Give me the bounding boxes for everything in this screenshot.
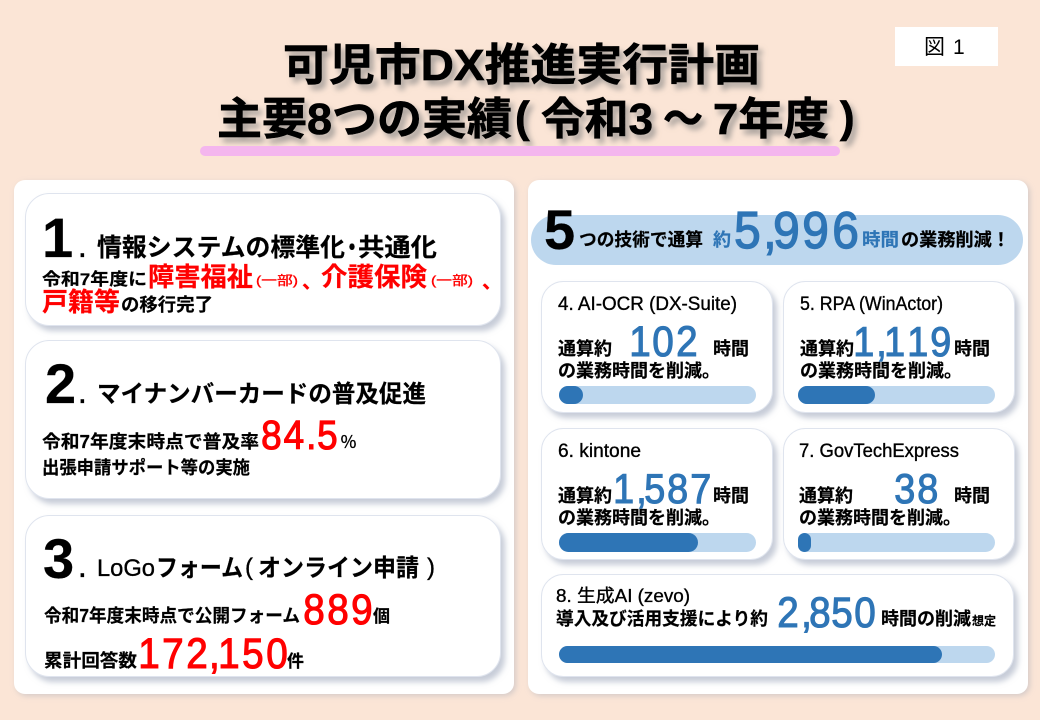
card 5: RPA: 5. RPA (WinActor) <box>800 294 943 315</box>
card 5: RPA: 時間 <box>954 339 990 359</box>
figure label: 図1 <box>924 36 965 59</box>
card 1: system standardization: 令和7年度に <box>42 269 147 289</box>
card 1: system standardization: 1 <box>42 206 73 269</box>
panel: left achievements <box>14 180 514 694</box>
card 6: kintone: 6. kintone <box>558 441 641 462</box>
card 5: RPA <box>784 282 1014 412</box>
banner: total hours reduced: 約 <box>713 230 731 250</box>
card 1: system standardization: 、 <box>302 271 322 293</box>
card 2: my number card: マイナンバーカードの普及促進 <box>97 381 426 408</box>
card 2: my number card: 84.5 <box>261 413 338 458</box>
card 4: AI-OCR: 通算約 <box>558 338 612 359</box>
card 7: GovTechExpress: の業務時間を削減。 <box>799 507 961 528</box>
card 1: system standardization: の移行完了 <box>121 295 213 315</box>
progress bar: 38 <box>798 533 995 552</box>
banner: total hours reduced <box>531 198 1023 265</box>
card 8: generative AI: 想定 <box>972 613 996 628</box>
banner: total hours reduced: 5 <box>544 198 575 261</box>
banner: total hours reduced: 5,996 <box>734 201 859 259</box>
title <box>217 41 855 144</box>
card 6: kintone: の業務時間を削減。 <box>558 507 720 528</box>
figure label <box>895 27 998 66</box>
title: 主要8つの実績 <box>217 95 512 144</box>
card 7: GovTechExpress: 通算約 <box>799 485 853 506</box>
title underline <box>200 146 840 156</box>
card 5: RPA: の業務時間を削減。 <box>800 360 962 381</box>
card 2: my number card: 令和7年度末時点で普及率 <box>42 431 259 452</box>
card 1: system standardization: (一部) <box>256 273 298 288</box>
card 1: system standardization: 、 <box>482 271 502 293</box>
title: 7年度 <box>713 95 829 144</box>
card 3: LoGo form: 889 <box>303 585 373 633</box>
card 3: LoGo form: 累計回答数 <box>44 650 137 671</box>
card 4: AI-OCR: 時間 <box>713 339 749 359</box>
card 7: GovTechExpress: 時間 <box>954 486 990 506</box>
banner: total hours reduced: の業務削減！ <box>901 229 1010 250</box>
banner: total hours reduced: 時間 <box>862 230 899 250</box>
card 8: generative AI: 時間の削減 <box>881 608 971 629</box>
card 3: LoGo form: ) <box>427 554 435 581</box>
title: 令和3 <box>541 95 653 144</box>
card 4: AI-OCR <box>542 282 772 412</box>
card 1: system standardization: 介護保険 <box>321 262 427 292</box>
card 3: LoGo form: オンライン申請 <box>258 555 419 582</box>
card 6: kintone: 通算約 <box>558 485 612 506</box>
card 3: LoGo form: ( <box>245 554 253 581</box>
card 4: AI-OCR: 4. AI-OCR (DX-Suite) <box>558 294 737 315</box>
title: ～ <box>663 95 703 144</box>
card 2: my number card: . <box>79 382 86 409</box>
card 3: LoGo form <box>26 516 500 677</box>
banner: total hours reduced: つの技術で通算 <box>579 229 703 250</box>
card 3: LoGo form: 件 <box>287 652 304 671</box>
card 7: GovTechExpress: 38 <box>894 466 938 512</box>
title: ) <box>840 93 855 142</box>
card 3: LoGo form: フォーム <box>156 555 243 582</box>
title: ( <box>515 93 530 142</box>
card 3: LoGo form: 令和7年度末時点で公開フォーム <box>44 605 300 626</box>
card 1: system standardization: 情報システムの標準化 <box>97 234 345 262</box>
card 3: LoGo form: 172,150 <box>138 629 288 677</box>
card 1: system standardization: ・ <box>342 234 362 262</box>
card 1: system standardization: 障害福祉 <box>148 262 253 292</box>
card 2: my number card: ％ <box>340 433 357 452</box>
card 8: generative AI: 8. 生成AI (zevo) <box>556 586 690 606</box>
progress bar: 1,119 <box>798 386 995 404</box>
card 5: RPA: 通算約 <box>800 338 854 359</box>
card 1: system standardization: 共通化 <box>358 234 437 262</box>
card 5: RPA: 1,119 <box>853 319 951 365</box>
progress bar: 2,850 <box>559 646 995 663</box>
card 3: LoGo form: 個 <box>373 607 390 626</box>
card 1: system standardization: (一部) <box>431 273 473 288</box>
card 4: AI-OCR: 102 <box>629 317 698 365</box>
card 3: LoGo form: LoGo <box>97 555 155 582</box>
title: 可児市DX推進実行計画 <box>283 41 760 90</box>
card 1: system standardization: 戸籍等 <box>42 287 120 317</box>
card 7: GovTechExpress: 7. GovTechExpress <box>799 441 959 462</box>
card 2: my number card: 出張申請サポート等の実施 <box>42 457 250 478</box>
panel: right technologies <box>528 180 1028 694</box>
progress bar: 1,587 <box>559 533 756 552</box>
card 2: my number card <box>26 340 500 498</box>
progress bar: 102 <box>559 386 756 404</box>
card 4: AI-OCR: の業務時間を削減。 <box>558 360 720 381</box>
card 6: kintone: 1,587 <box>613 466 711 512</box>
card 6: kintone: 時間 <box>713 486 749 506</box>
card 1: system standardization: . <box>79 236 86 263</box>
card 1: system standardization <box>26 194 502 326</box>
card 2: my number card: 2 <box>45 352 76 415</box>
card 8: generative AI: 2,850 <box>777 588 876 636</box>
card 8: generative AI: 導入及び活用支援により約 <box>556 609 768 629</box>
card 3: LoGo form: 3 <box>43 527 74 590</box>
card 8: generative AI <box>542 574 1014 676</box>
card 3: LoGo form: . <box>79 556 86 583</box>
card 6: kintone <box>542 428 772 560</box>
card 7: GovTechExpress <box>784 428 1014 560</box>
